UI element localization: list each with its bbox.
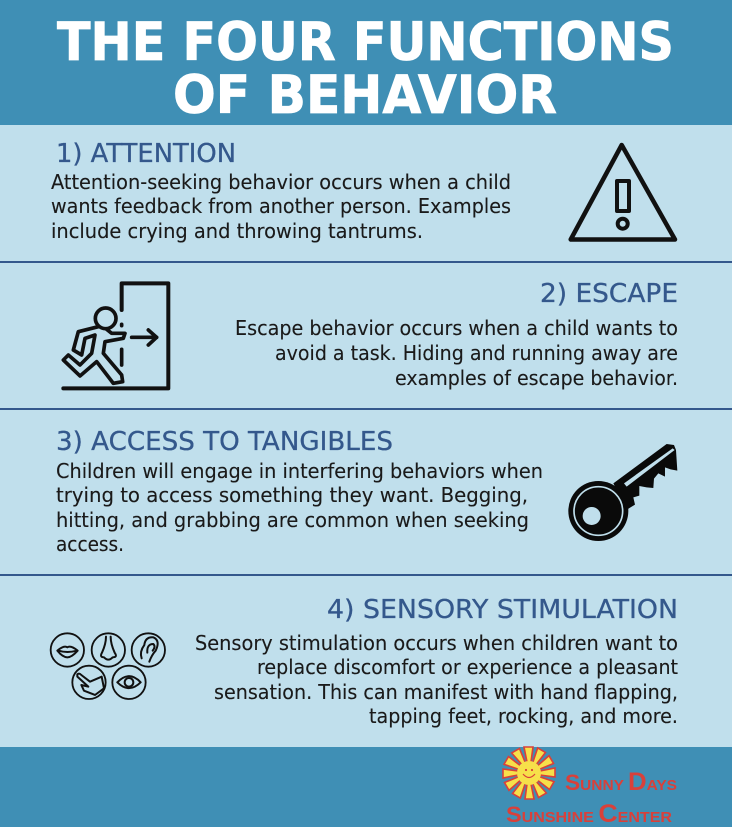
text block: access to tangibles <box>56 459 543 556</box>
text block: attention: wants feedback from another person. Examples <box>51 194 511 218</box>
panel: sensory stimulation <box>51 595 678 728</box>
text block: escape: Escape behavior occurs when a child wants to <box>235 316 678 340</box>
icon: person running out of door <box>63 283 168 388</box>
panel: escape <box>63 279 678 390</box>
panel background <box>0 125 732 747</box>
text block: sensory stimulation <box>195 631 678 728</box>
panel: attention <box>51 139 675 243</box>
icon: warning triangle <box>571 145 675 240</box>
text block: access to tangibles: trying to access something they want. Begging, <box>56 483 528 507</box>
text block: access to tangibles: Children will engage in interfering behaviors when <box>56 459 543 483</box>
text block: access to tangibles: hitting, and grabbing are common when seeking <box>56 508 529 532</box>
text block: escape <box>235 316 678 390</box>
header band with title: OF BEHAVIOR <box>173 65 557 126</box>
logo: Sunny Days Sunshine Center <box>503 747 677 827</box>
text block: attention: Attention-seeking behavior occurs when a child <box>51 170 511 194</box>
text block: sensory stimulation: tapping feet, rocking, and more. <box>369 704 678 728</box>
footer band <box>0 747 732 827</box>
heading: sensory stimulation: 4) SENSORY STIMULATION <box>327 595 678 625</box>
text block: access to tangibles: access. <box>56 532 124 556</box>
text block: escape: examples of escape behavior. <box>395 366 678 390</box>
text block: escape: avoid a task. Hiding and running away are <box>275 341 678 365</box>
text block: attention: include crying and throwing tantrums. <box>51 219 423 243</box>
header band with title <box>0 0 732 126</box>
heading: access to tangibles: 3) ACCESS TO TANGIBLES <box>56 427 393 457</box>
text block: sensory stimulation: replace discomfort or experience a pleasant <box>257 655 678 679</box>
text block: sensory stimulation: Sensory stimulation occurs when children want to <box>195 631 678 655</box>
icon: five senses <box>51 633 165 699</box>
header band with title: THE FOUR FUNCTIONS <box>57 12 674 73</box>
text block: attention <box>51 170 511 243</box>
heading: escape: 2) ESCAPE <box>540 279 678 309</box>
text block: sensory stimulation: sensation. This can manifest with hand flapping, <box>214 680 678 704</box>
icon: sun <box>503 747 555 799</box>
logo line 1: SUNNY DAYS <box>565 768 677 796</box>
heading: attention: 1) ATTENTION <box>56 139 236 169</box>
icon: key <box>568 444 677 541</box>
panel: access to tangibles <box>56 427 677 556</box>
